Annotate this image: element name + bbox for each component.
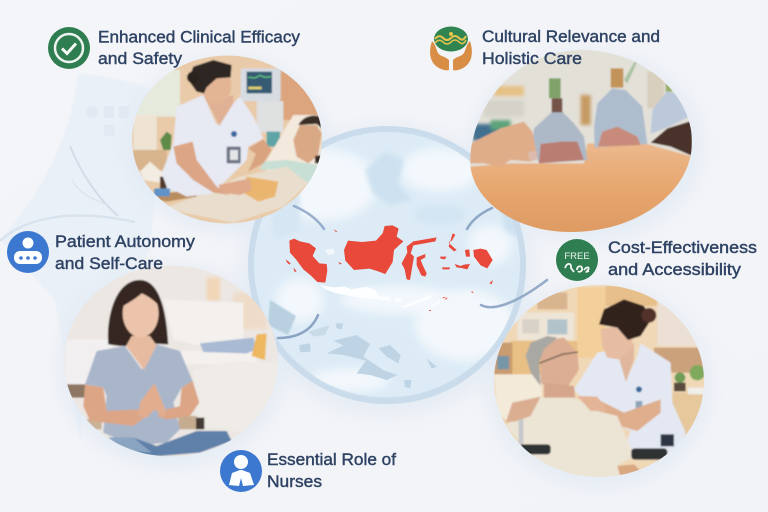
heading: Essential Role of Nurses: Essential Role of — [267, 451, 396, 469]
heading: Enhanced Clinical Efficacy and Safety: Enhanced Clinical Efficacy — [98, 28, 301, 46]
orbit arc strokes — [278, 206, 547, 338]
heading: Patient Autonomy and Self-Care: Patient Autonomy — [55, 233, 196, 251]
heading: Essential Role of Nurses: Nurses — [267, 473, 322, 491]
heading: Cultural Relevance and Holistic Care: Cultural Relevance and — [482, 28, 660, 46]
heading: Patient Autonomy and Self-Care — [55, 233, 196, 273]
icon: free green badge — [556, 239, 598, 281]
heading: Cultural Relevance and Holistic Care — [482, 28, 660, 68]
icon: green check badge — [48, 27, 90, 69]
photo: nurse supporting elderly man in wheelchair — [491, 283, 707, 479]
globe: watercolor clouds and landmasses — [268, 148, 525, 392]
icon: nurse figure — [220, 450, 262, 492]
heading: Cultural Relevance and Holistic Care: Holistic Care — [482, 50, 582, 68]
background wisp: left watercolor panel — [0, 73, 165, 440]
heading: Essential Role of Nurses — [267, 451, 396, 491]
heading: Cost-Effectiveness and Accessibility: Cost-Effectiveness — [608, 239, 757, 257]
photo: nurse applying warm compress to patient in bed — [130, 53, 323, 227]
heading: Enhanced Clinical Efficacy and Safety: and Safety — [98, 50, 183, 68]
Indonesia islands in red — [286, 225, 493, 311]
Java and Lesser Sunda in white — [320, 248, 455, 308]
soft halos behind photos — [61, 54, 707, 484]
heading: Patient Autonomy and Self-Care: and Self-Care — [55, 255, 163, 273]
photo: cupping therapy on back — [464, 47, 697, 237]
icon: free green badge: FREE — [564, 251, 590, 262]
heading: Cost-Effectiveness and Accessibility — [608, 239, 757, 279]
icon: hands holding green emblem — [430, 26, 472, 70]
photo: woman meditating at home — [60, 263, 283, 459]
heading: Enhanced Clinical Efficacy and Safety — [98, 28, 301, 68]
icon: patient with speech dots — [7, 231, 49, 273]
heading: Cost-Effectiveness and Accessibility: and Accessibility — [608, 261, 742, 279]
globe with Indonesia map — [248, 126, 547, 404]
